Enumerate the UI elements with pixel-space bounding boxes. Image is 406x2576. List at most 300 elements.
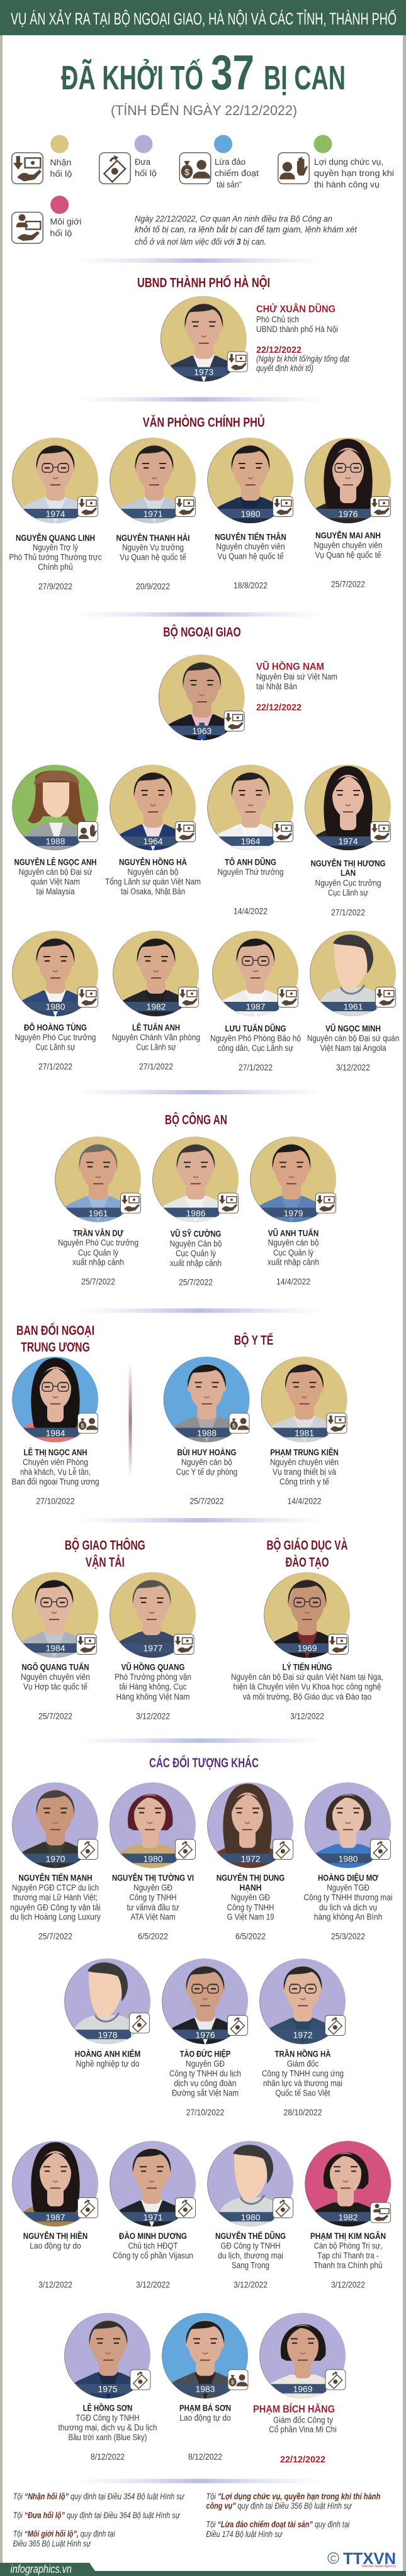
caption: LÊ HỒNG SƠN xyxy=(83,2403,132,2412)
caption: du lịch và dịch vụ xyxy=(319,1902,377,1912)
logo: TTXVN: TTXVN xyxy=(343,2549,396,2568)
portrait xyxy=(12,438,98,523)
caption: BÙI HUY HOÀNG xyxy=(178,1448,237,1457)
title: BỊ CAN xyxy=(264,59,346,97)
portrait: 1980 xyxy=(240,509,261,519)
person: Nguyễn Tiến Thân xyxy=(207,438,293,590)
portrait: 1988 xyxy=(45,836,65,846)
legend: môi giới hối lộ xyxy=(12,196,81,243)
caption: (Ngày bị khởi tố/ngày tống đạt xyxy=(256,354,350,364)
caption: Lao động tự do xyxy=(179,2413,231,2423)
caption: 6/5/2022 xyxy=(138,1932,168,1941)
caption: PHẠM BÁ SƠN xyxy=(179,2403,231,2412)
person: Nguyễn Mai Anh xyxy=(305,438,391,589)
portrait xyxy=(12,2141,98,2240)
caption: Công ty TNHH xyxy=(227,1902,274,1912)
caption: Giám đốc xyxy=(287,2059,319,2068)
caption: UBND thành phố Hà Nội xyxy=(256,325,338,334)
caption: xuất nhập cảnh xyxy=(72,1258,124,1267)
caption: Hàng không Việt Nam xyxy=(116,1692,190,1701)
person: Phạm Bá Sơn xyxy=(162,2313,248,2462)
caption: NGUYỄN TIẾN THÂN xyxy=(215,532,286,541)
portrait: 1978 xyxy=(98,2030,118,2040)
person: Nguyễn Thị Tường Vi xyxy=(107,1782,196,1941)
caption: PHẠM THỊ KIM NGÂN xyxy=(310,2231,386,2241)
person: Lưu Tuấn Dũng xyxy=(210,931,301,1072)
person: Lê Thị Ngọc Anh xyxy=(11,1357,99,1506)
caption xyxy=(313,531,383,589)
caption xyxy=(303,1874,393,1941)
caption: GĐ Công ty TNHH xyxy=(220,2241,281,2251)
person: Đỗ Hoàng Tùng xyxy=(12,931,98,1072)
heading: Ban Đối ngoại Trung ương: TRUNG ƯƠNG xyxy=(21,1340,90,1355)
logo: TTXVN: Vietnam News Agency xyxy=(361,2565,397,2568)
caption xyxy=(231,1663,383,1721)
caption: Nguyên Vụ trưởng xyxy=(122,543,184,552)
caption: 25/7/2022 xyxy=(331,580,365,589)
legend: nhận hối lộ: Nhận xyxy=(50,158,71,167)
person: Hoàng Anh Kiếm xyxy=(64,1958,150,2068)
portrait: 1964 xyxy=(240,836,261,846)
person: Tào Đức Hiệp xyxy=(162,1958,248,2117)
person: Nguyễn Thị Hương Lan xyxy=(305,765,391,917)
portrait: 1984 xyxy=(45,1643,65,1653)
caption: Nguyên Đại sứ Việt Nam xyxy=(256,672,337,682)
heading: UBND Hà Nội: UBND THÀNH PHỐ HÀ NỘI xyxy=(137,275,270,291)
caption: Bầu trời xanh (Blue Sky) xyxy=(68,2433,147,2442)
legend: lừa đảo chiếm đoạt tài sản: chiếm đoạt xyxy=(215,169,259,178)
caption: Cục Quản lý xyxy=(273,1248,313,1257)
caption: Nguyên Cán bộ xyxy=(170,1239,222,1248)
caption: Chuyên viên Phòng xyxy=(23,1457,88,1467)
caption: Cục Lãnh sự xyxy=(35,1043,76,1052)
caption: NGUYỄN LÊ NGỌC ANH xyxy=(14,858,97,867)
logo: TTXVN: C xyxy=(330,2553,336,2563)
portrait: 1976 xyxy=(339,509,358,519)
caption: TRẦN HỒNG HÀ xyxy=(274,2049,331,2058)
portrait xyxy=(107,1782,196,1882)
caption: 25/7/2022 xyxy=(38,1932,72,1941)
caption: Nguyên Trợ lý xyxy=(33,543,78,552)
caption: TÔ ANH DŨNG xyxy=(225,858,276,867)
portrait: 1982 xyxy=(339,2212,358,2223)
portrait xyxy=(305,438,391,523)
portrait: 1969 xyxy=(293,2384,313,2394)
caption: Nghề nghiệp tự do xyxy=(76,2059,140,2068)
caption: Vụ trang thiết bị và xyxy=(273,1467,336,1477)
legal notes: right column: công vụ" quy định tại Điều 356 Bộ luật Hình sự xyxy=(206,2501,352,2511)
caption xyxy=(15,1023,96,1072)
person: Vũ Sỹ Cường xyxy=(152,1136,239,1287)
caption: 25/3/2022 xyxy=(331,1932,365,1941)
caption: VŨ ANH TUẤN xyxy=(268,1228,319,1238)
caption: Nguyên cán bộ xyxy=(181,1457,232,1467)
portrait xyxy=(305,765,391,850)
heading: Bộ Giao thông Vận tải: BỘ GIAO THÔNG xyxy=(65,1538,145,1553)
caption: thương mại Lữ Hành Việt; xyxy=(13,1893,98,1902)
caption: ĐỖ HOÀNG TÙNG xyxy=(24,1023,87,1033)
caption xyxy=(58,2403,157,2462)
caption: Giám đốc Công ty xyxy=(273,2415,333,2424)
caption: Tạp chí Thanh tra - xyxy=(317,2251,379,2260)
caption: Đường sắt Việt Nam xyxy=(172,2088,239,2097)
caption xyxy=(58,1228,138,1287)
caption: 3/12/2022 xyxy=(136,2280,170,2290)
caption: Nguyên PGĐ CTCP du lịch xyxy=(12,1883,99,1892)
portrait xyxy=(11,1572,98,1672)
caption: Quốc tế Sao Việt xyxy=(276,2088,330,2097)
caption: Cục Lãnh sự xyxy=(328,888,368,897)
caption: nguyên GĐ Công ty vận tải xyxy=(10,1902,101,1912)
caption xyxy=(10,1874,101,1941)
portrait: 1963 xyxy=(192,726,211,736)
caption xyxy=(268,1228,319,1287)
caption: Nguyên chuyên viên xyxy=(270,1457,339,1467)
person: Trần Văn Dự xyxy=(55,1136,141,1287)
caption xyxy=(105,858,201,896)
caption xyxy=(217,1874,285,1941)
person: Nguyễn Quang Linh xyxy=(9,438,102,591)
caption: NGUYỄN THỊ TƯỜNG VI xyxy=(112,1874,194,1883)
caption: tư vấnvà đầu tư xyxy=(127,1902,179,1912)
person: Nguyễn Thế Dũng xyxy=(207,2141,293,2290)
heading: Bộ Giáo dục và Đào tạo: ĐÀO TẠO xyxy=(286,1555,329,1570)
heading: Ban Đối ngoại Trung ương xyxy=(16,1323,94,1355)
heading: Bộ Công an: BỘ CÔNG AN xyxy=(165,1113,227,1128)
portrait xyxy=(110,438,196,523)
portrait: 1977 xyxy=(144,1643,163,1653)
heading: Ban Đối ngoại Trung ương: BAN ĐỐI NGOẠI xyxy=(16,1323,94,1338)
caption: Công ty TNHH xyxy=(130,1893,176,1902)
portrait xyxy=(207,438,293,523)
portrait: 1988 xyxy=(197,1428,217,1438)
caption: dịch vụ công đoàn xyxy=(174,2079,237,2088)
caption: hàng không An Bình xyxy=(314,1913,382,1922)
caption: Chủ tịch HĐQT xyxy=(128,2241,178,2251)
caption xyxy=(310,2231,386,2290)
portrait: 1971 xyxy=(144,2212,163,2223)
caption: 22/12/2022 xyxy=(280,2455,325,2465)
portrait xyxy=(303,2141,391,2240)
legend: đưa hối lộ xyxy=(99,135,157,184)
portrait: 1980 xyxy=(240,2212,261,2223)
caption: Công trình y tế xyxy=(279,1477,329,1487)
person: Nguyễn Tiến Mạnh xyxy=(10,1782,101,1941)
legend: lợi dụng chức vụ xyxy=(278,135,394,189)
caption: Nguyên Phó Cục trưởng xyxy=(58,1238,138,1248)
portrait: 1983 xyxy=(195,2384,215,2394)
intro paragraph: khởi tố bị can, ra lệnh bắt bị can để tạm giam, lệnh khám xét xyxy=(135,225,358,234)
caption xyxy=(179,2403,231,2462)
caption: Nguyên Chánh Văn phòng xyxy=(112,1033,200,1042)
caption: 27/10/2022 xyxy=(37,1497,74,1506)
caption: Sang Trọng xyxy=(232,2261,269,2270)
caption: tải Hàng không, Cục xyxy=(120,1682,187,1692)
caption: Nguyên Thứ trưởng xyxy=(218,867,283,877)
caption: Nguyên GĐ xyxy=(231,1893,270,1902)
footer band: infographics.vn xyxy=(10,2563,72,2575)
caption: tại Osaka, Nhật Bản xyxy=(121,887,185,896)
caption: và môi trường, Bộ Giáo dục và Đào tạo xyxy=(243,1692,371,1701)
caption: 6/5/2022 xyxy=(235,1932,266,1941)
caption: Nguyên Phó Phòng Bảo hộ xyxy=(210,1033,301,1043)
legend: nhận hối lộ: hối lộ xyxy=(50,169,72,179)
caption: 25/7/2022 xyxy=(38,1711,72,1721)
person: Ngô Quang Tuấn xyxy=(11,1572,98,1721)
caption: 14/4/2022 xyxy=(287,1497,321,1506)
caption xyxy=(112,1023,200,1072)
caption: 3/12/2022 xyxy=(331,2280,365,2290)
caption: Nguyên Phó Cục trưởng xyxy=(15,1033,96,1042)
caption: Cục Quản lý xyxy=(78,1248,118,1257)
heading: Các đối tượng khác: CÁC ĐỐI TƯỢNG KHÁC xyxy=(149,1755,259,1770)
caption: Cục Lãnh sự xyxy=(136,1043,176,1052)
heading: Bộ Giao thông Vận tải: VẬN TẢI xyxy=(86,1555,125,1570)
caption: HẠNH xyxy=(239,1883,262,1892)
person: Vũ Anh Tuấn xyxy=(249,1136,336,1287)
legal notes: right column: Tội “Lừa đảo chiếm đoạt tài sản” quy định tại xyxy=(206,2520,350,2529)
caption: Nguyên chuyên viên xyxy=(216,541,285,551)
caption: Cục Quản lý xyxy=(176,1248,216,1258)
caption: Vụ Quan hệ quốc tế xyxy=(217,552,284,561)
caption: NGUYỄN THỊ HIỀN xyxy=(23,2231,87,2241)
person: Chử Xuân Dũng xyxy=(161,296,350,382)
caption: G Việt Nam 19 xyxy=(227,1913,274,1922)
caption: 8/12/2022 xyxy=(188,2452,222,2462)
portrait: 1980 xyxy=(339,1853,358,1863)
caption: 3/12/2022 xyxy=(234,2280,268,2290)
caption: du lịch Hoàng Long Luxury xyxy=(10,1913,101,1922)
portrait xyxy=(64,1958,150,2058)
heading: Bộ Ngoại giao: BỘ NGOẠI GIAO xyxy=(163,625,241,640)
caption: Công ty TNHH cung ứng xyxy=(262,2068,344,2078)
title: ĐÃ KHỞI TỐ xyxy=(61,59,203,97)
person: Phạm Trung Kiên xyxy=(261,1357,347,1506)
caption xyxy=(21,1663,90,1721)
portrait xyxy=(152,1136,239,1223)
portrait: 1984 xyxy=(45,1428,65,1438)
person: Hoàng Diệu Mơ xyxy=(303,1782,393,1941)
caption: TRẦN VĂN DỰ xyxy=(73,1228,124,1238)
caption: NGUYỄN THỊ DUNG xyxy=(217,1874,285,1883)
portrait: 1964 xyxy=(144,836,163,846)
caption: NGUYỄN THANH HẢI xyxy=(116,533,190,543)
caption: Công ty TNHH du lịch xyxy=(169,2068,241,2078)
caption: LAN xyxy=(341,869,356,878)
person: Vũ Hồng Quang xyxy=(109,1572,196,1721)
caption: VŨ HỒNG QUANG xyxy=(121,1663,185,1672)
caption: Nguyên GĐ xyxy=(186,2059,225,2068)
caption: VŨ HỒNG NAM xyxy=(256,660,324,672)
caption xyxy=(256,303,350,373)
portrait: 1986 xyxy=(186,1208,206,1218)
legal notes: right column xyxy=(206,2492,380,2539)
footer band xyxy=(0,2563,406,2576)
portrait: 1972 xyxy=(240,1853,261,1863)
caption: NGUYỄN HỒNG HÀ xyxy=(119,858,187,867)
portrait: 1979 xyxy=(283,1208,303,1218)
portrait: 1982 xyxy=(146,1002,166,1012)
portrait xyxy=(64,2313,151,2412)
caption: LÝ TIẾN HÙNG xyxy=(282,1663,332,1672)
caption: 3/12/2022 xyxy=(38,2280,72,2290)
heading: Bộ Giáo dục và Đào tạo xyxy=(267,1538,347,1570)
caption: nhân lực và thương mại xyxy=(263,2079,342,2088)
caption xyxy=(9,533,102,591)
portrait xyxy=(162,1958,248,2058)
caption xyxy=(23,2231,87,2290)
portrait: 1970 xyxy=(45,1853,65,1863)
portrait: 1972 xyxy=(293,2030,313,2040)
portrait: 1987 xyxy=(245,1002,266,1012)
caption xyxy=(170,1229,222,1287)
caption: VŨ SỸ CƯỜNG xyxy=(171,1229,221,1238)
caption: 27/1/2022 xyxy=(139,1062,173,1072)
caption: Nguyên chuyên viên xyxy=(21,1672,90,1682)
caption: Nguyên Cục trưởng xyxy=(315,878,381,887)
caption xyxy=(115,1663,191,1721)
legend xyxy=(12,135,394,243)
caption: Nguyên cán bộ xyxy=(127,867,179,877)
person: Phạm Bích Hằng xyxy=(253,2313,346,2465)
portrait: 1961 xyxy=(344,1002,363,1012)
person: Đào Minh Dương xyxy=(109,2141,196,2290)
portrait: 1976 xyxy=(195,2030,215,2040)
caption: Thanh tra Chính phủ xyxy=(313,2261,383,2270)
caption: 3/12/2022 xyxy=(336,1063,370,1072)
portrait xyxy=(305,1782,391,1882)
legal notes: left column: Tội “Nhận hối lộ” quy định tại Điều 354 Bộ luật Hình sự xyxy=(13,2492,185,2501)
person: Lê Hồng Sơn xyxy=(58,2313,157,2462)
portrait xyxy=(109,2141,196,2240)
caption xyxy=(11,1448,99,1506)
caption: ĐÀO MINH DƯƠNG xyxy=(119,2231,187,2241)
caption: Nguyên TGĐ xyxy=(327,1883,369,1892)
portrait xyxy=(205,1782,293,1882)
caption: NGUYỄN THỊ HƯƠNG xyxy=(311,858,385,868)
legend: đưa hối lộ: hối lộ xyxy=(135,169,157,178)
caption: Vụ Hợp tác quốc tế xyxy=(23,1682,87,1692)
caption: 27/1/2022 xyxy=(331,908,365,917)
caption: 27/1/2022 xyxy=(38,1062,72,1072)
person: Nguyễn Hồng Hà xyxy=(105,765,201,896)
caption xyxy=(311,858,385,917)
caption: du lịch, thương mại xyxy=(218,2251,283,2260)
person: Nguyễn Thị Hiền xyxy=(12,2141,98,2290)
portrait xyxy=(159,655,245,740)
caption xyxy=(75,2049,140,2068)
person: Tô Anh Dũng xyxy=(207,765,293,916)
subtitle: (TÍNH ĐẾN NGÀY 22/12/2022) xyxy=(111,103,297,118)
legend: lợi dụng chức vụ: thi hành công vụ xyxy=(314,180,380,189)
caption: 20/9/2022 xyxy=(136,582,170,591)
caption: 28/10/2022 xyxy=(283,2107,322,2117)
caption: Ban đối ngoại Trung ương xyxy=(11,1477,99,1487)
legal notes: left column: Tội “Môi giới hối lộ”, quy định tại xyxy=(13,2529,115,2539)
caption xyxy=(14,858,97,896)
portrait xyxy=(212,931,298,1016)
caption: Phó Trưởng phòng vận xyxy=(115,1672,191,1682)
caption xyxy=(307,1024,399,1072)
caption: Phó Chủ tịch xyxy=(256,315,299,325)
caption: 14/4/2022 xyxy=(276,1277,310,1287)
portrait xyxy=(259,1958,346,2058)
portrait xyxy=(109,1572,196,1672)
person: Vũ Hồng Nam xyxy=(159,655,337,740)
caption xyxy=(253,2403,337,2465)
person: Trần Hồng Hà xyxy=(259,1958,346,2117)
caption: Lao động tự do xyxy=(30,2241,81,2251)
caption: 8/12/2022 xyxy=(91,2452,125,2462)
portrait xyxy=(259,2313,346,2412)
caption: thương mại, dịch vụ & Du lịch xyxy=(58,2423,157,2432)
caption: PHẠM BÍCH HẰNG xyxy=(253,2403,335,2415)
caption: quán Việt Nam xyxy=(31,877,80,887)
person: Nguyễn Thị Dung Hạnh xyxy=(205,1782,293,1941)
caption: Công ty TNHH thương mại xyxy=(303,1893,393,1902)
caption: Cán bộ Phòng Trị sự, xyxy=(314,2241,382,2251)
caption: quyết định khởi tố) xyxy=(256,364,313,373)
caption: ATA Việt Nam xyxy=(131,1913,175,1922)
caption xyxy=(215,532,286,590)
portrait xyxy=(164,1357,249,1443)
legend: môi giới hối lộ: hối lộ xyxy=(50,229,72,238)
caption: xuất nhập cảnh xyxy=(268,1258,319,1267)
portrait: 1969 xyxy=(297,1643,317,1653)
legend: lợi dụng chức vụ: Lợi dụng chức vụ, xyxy=(314,157,383,167)
caption: 14/4/2022 xyxy=(234,907,268,916)
heading: Bộ Giao thông Vận tải xyxy=(65,1538,145,1570)
title: 37 xyxy=(211,45,254,100)
caption: 25/7/2022 xyxy=(81,1277,115,1287)
caption: Cổ phần Vina Mi Chi xyxy=(269,2425,337,2434)
caption: công dân, Cục Lãnh sự xyxy=(218,1043,293,1053)
caption xyxy=(176,1448,237,1506)
caption: Tổng Lãnh sự quán Việt Nam xyxy=(105,877,201,887)
caption xyxy=(210,1024,301,1072)
person: Lý Tiến Hùng xyxy=(231,1572,383,1721)
portrait xyxy=(250,1136,336,1223)
caption: Nguyên cán bộ Đại sứ quán Việt Nam tại Nga, xyxy=(231,1672,383,1682)
caption: TÀO ĐỨC HIỆP xyxy=(180,2049,230,2058)
caption: 22/12/2022 xyxy=(256,702,302,713)
caption: nhà khách, Vụ Lễ tân, xyxy=(20,1467,91,1477)
caption: HOÀNG DIỆU MƠ xyxy=(318,1874,378,1883)
legend: môi giới hối lộ: Môi giới xyxy=(50,217,81,226)
caption: Phó Thủ tướng Thường trực xyxy=(9,553,102,562)
portrait: 1971 xyxy=(144,509,163,519)
legend: nhận hối lộ xyxy=(12,135,72,184)
caption: 27/10/2022 xyxy=(186,2107,224,2117)
portrait xyxy=(310,931,396,1016)
portrait xyxy=(207,2141,293,2240)
caption: tại Nhật Bản xyxy=(256,682,297,691)
caption: 18/8/2022 xyxy=(234,580,268,590)
caption: NGUYỄN TIẾN MẠNH xyxy=(19,1874,92,1883)
intro paragraph: Ngày 22/12/2022, Cơ quan An ninh điều tra Bộ Công an xyxy=(135,214,332,224)
caption xyxy=(169,2049,241,2117)
caption: Cục Y tế dự phòng xyxy=(176,1467,237,1477)
caption: 22/12/2022 xyxy=(256,345,302,355)
person: Nguyễn Thanh Hải xyxy=(110,438,197,591)
heading: Bộ Y tế: BỘ Y TẾ xyxy=(234,1333,273,1348)
caption: PHẠM TRUNG KIÊN xyxy=(270,1448,339,1457)
caption xyxy=(113,2231,193,2290)
caption xyxy=(256,660,337,713)
caption: HOÀNG ANH KIẾM xyxy=(75,2049,140,2058)
caption xyxy=(262,2049,344,2117)
title xyxy=(61,45,346,100)
